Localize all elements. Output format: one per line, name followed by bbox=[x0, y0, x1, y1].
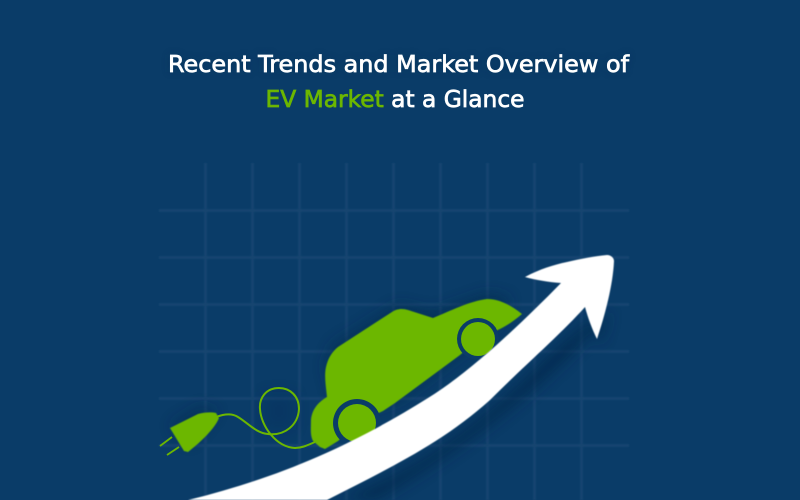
rear wheel bbox=[461, 322, 495, 356]
title line 2: EV Market at a Glance bbox=[266, 87, 524, 113]
rising white arrow bbox=[188, 255, 614, 500]
front wheel arch bbox=[333, 399, 381, 447]
car bbox=[311, 299, 522, 449]
electric plug and cable bbox=[160, 388, 315, 455]
plug body bbox=[170, 412, 219, 452]
car body bbox=[311, 299, 522, 449]
title line 1: Recent Trends and Market Overview of bbox=[168, 52, 630, 78]
shadows bbox=[170, 268, 622, 500]
background grid bbox=[159, 163, 629, 500]
front wheel bbox=[338, 404, 376, 442]
rear wheel arch bbox=[457, 318, 499, 360]
title: Recent Trends and Market Overview of bbox=[168, 52, 629, 78]
charging cable bbox=[216, 388, 315, 448]
plug prongs bbox=[160, 437, 179, 455]
title bbox=[168, 52, 630, 113]
